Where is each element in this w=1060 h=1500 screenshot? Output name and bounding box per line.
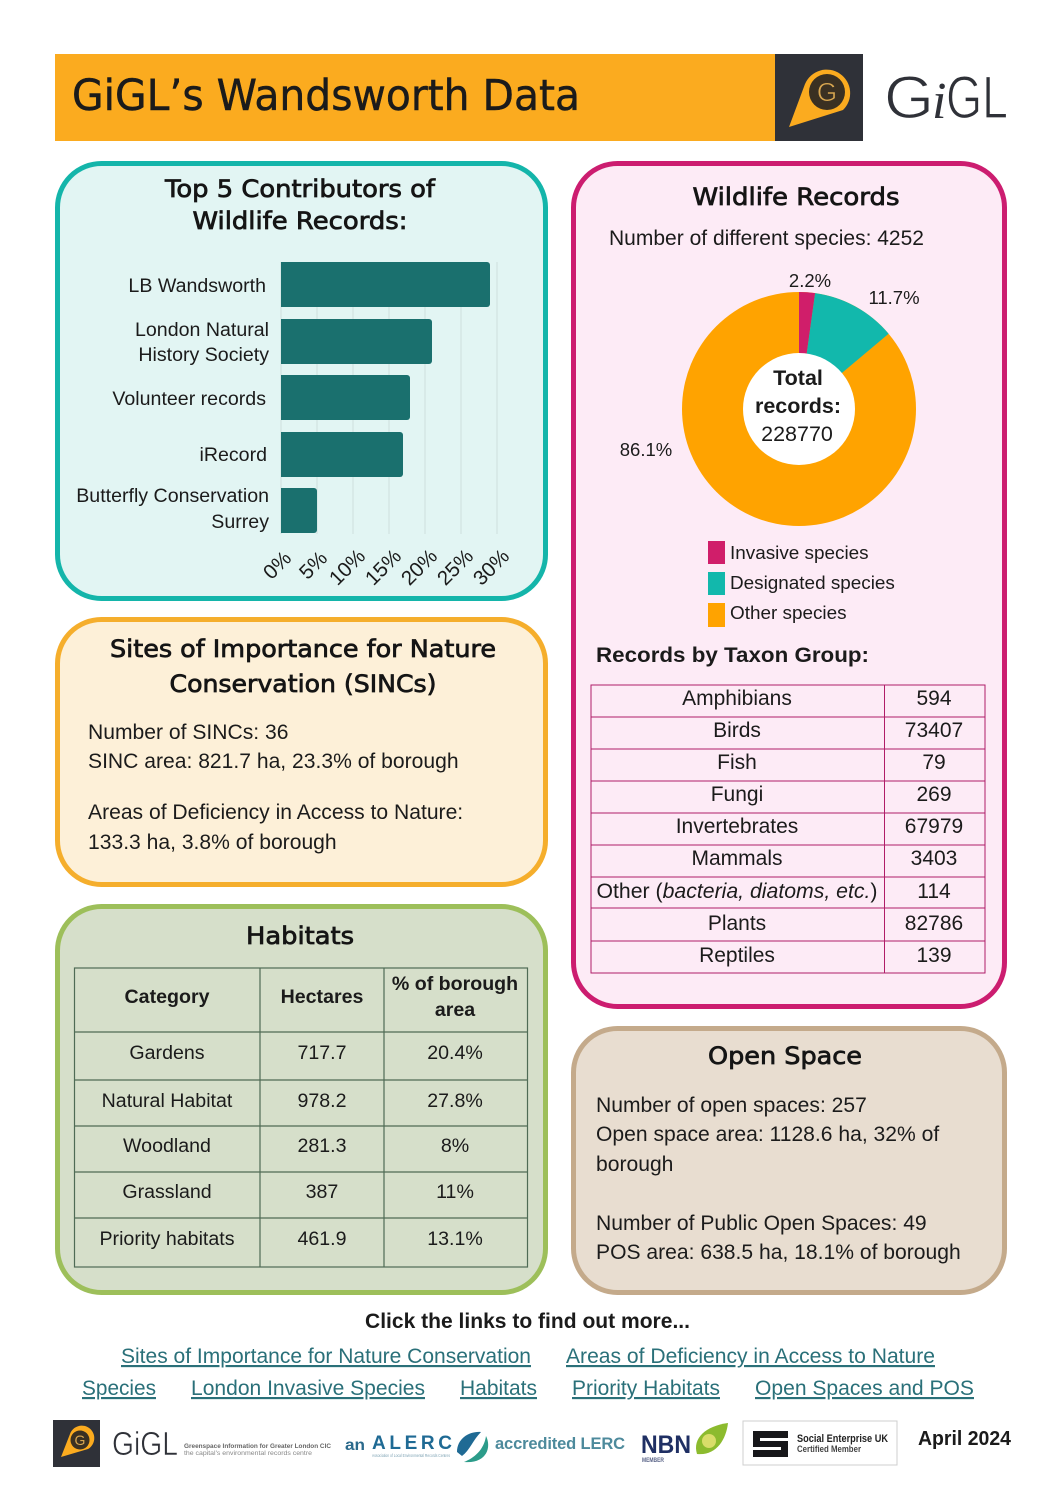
table: taxon groups: 594 bbox=[916, 687, 952, 710]
donut chart: species share of records bbox=[620, 270, 920, 526]
heading: records by taxon group: Records by Taxon Group: bbox=[596, 643, 869, 667]
bar chart: contributors: iRecord bbox=[199, 444, 267, 466]
logo: GiGL wordmark bbox=[884, 64, 1008, 131]
title: GiGL’s Wandsworth Data bbox=[72, 71, 580, 121]
bar chart: contributors: History Society bbox=[138, 344, 269, 366]
bar chart: contributors: 5% bbox=[295, 547, 332, 584]
table: habitats: Hectares bbox=[281, 986, 363, 1008]
table: taxon groups: Fish bbox=[717, 751, 757, 774]
logo: GiGL wordmark: G bbox=[884, 64, 934, 131]
table: habitats: Gardens bbox=[129, 1042, 205, 1064]
footer logo: NBN member bbox=[641, 1423, 728, 1464]
table: taxon groups: 139 bbox=[916, 944, 952, 967]
heading: habitats: Habitats bbox=[246, 922, 354, 950]
text: SINC figures: SINC area: 821.7 ha, 23.3% of borough bbox=[88, 750, 459, 773]
table: taxon groups: 73407 bbox=[905, 719, 963, 742]
heading: top 5 contributors: Top 5 Contributors of bbox=[164, 175, 436, 203]
heading: SINCs: Sites of Importance for Nature bbox=[110, 635, 496, 663]
table: habitats: % of borough bbox=[392, 973, 518, 995]
panel: SINCs bbox=[58, 620, 546, 884]
text: SINC figures: Areas of Deficiency in Access to Nature: bbox=[88, 801, 463, 824]
table: habitats bbox=[74, 968, 528, 1267]
table: taxon groups: Other (bacteria, diatoms, etc.) bbox=[596, 880, 878, 903]
table: taxon groups: Fungi bbox=[711, 783, 763, 806]
text: SINC figures bbox=[88, 721, 463, 854]
table: habitats: 8% bbox=[441, 1135, 469, 1157]
footer logo: GiGL: G bbox=[75, 1432, 85, 1448]
table: taxon groups: 114 bbox=[917, 880, 951, 903]
table: habitats: Natural Habitat bbox=[102, 1090, 233, 1112]
footer logo: ALERC accredited LERC: an bbox=[345, 1437, 365, 1454]
table: habitats: 461.9 bbox=[297, 1228, 347, 1250]
bar chart: contributors: 25% bbox=[433, 545, 478, 590]
bar chart: contributors: LB Wandsworth bbox=[128, 275, 266, 297]
footer logo: ALERC accredited LERC bbox=[345, 1432, 625, 1462]
links heading: Click the links to find out more... bbox=[365, 1310, 690, 1333]
bar chart: contributors: London Natural bbox=[135, 319, 269, 341]
text: species count: Number of different species: 4252 bbox=[609, 227, 924, 250]
text: open space figures: Open space area: 1128.6 ha, 32% of bbox=[596, 1123, 939, 1146]
legend: Invasive species bbox=[730, 543, 869, 564]
donut chart: species share of records: 228770 bbox=[761, 422, 833, 446]
bar chart: contributors: 0% bbox=[259, 547, 296, 584]
links: Species bbox=[82, 1376, 156, 1400]
icon: GiGL pin logo: G bbox=[817, 77, 837, 107]
text: open space figures: Number of open spaces: 257 bbox=[596, 1094, 867, 1117]
footer logo: ALERC accredited LERC: ALERC bbox=[372, 1433, 452, 1454]
table: taxon groups bbox=[591, 685, 985, 973]
legend: Designated species bbox=[730, 573, 895, 594]
footer logo: ALERC accredited LERC: accredited LERC bbox=[495, 1435, 625, 1453]
table: taxon groups: 82786 bbox=[905, 912, 963, 935]
table: taxon groups: 79 bbox=[922, 751, 946, 774]
heading: open space: Open Space bbox=[708, 1042, 862, 1070]
links: Open Spaces and POS bbox=[755, 1376, 974, 1400]
table: habitats: Priority habitats bbox=[99, 1228, 235, 1250]
footer logo: Social Enterprise UK: Certified Member bbox=[797, 1444, 861, 1455]
table: habitats: area bbox=[435, 999, 476, 1021]
legend: Other species bbox=[730, 603, 847, 624]
text: open space figures: borough bbox=[596, 1153, 673, 1176]
donut chart: species share of records: Total bbox=[773, 366, 823, 390]
footer logo: Social Enterprise UK: Social Enterprise UK bbox=[797, 1433, 888, 1445]
table: habitats: 387 bbox=[306, 1181, 338, 1203]
donut chart: species share of records: 11.7% bbox=[868, 287, 920, 308]
bar chart: contributors: 20% bbox=[397, 545, 442, 590]
logo: GiGL wordmark: i bbox=[932, 73, 946, 130]
links bbox=[82, 1344, 974, 1400]
heading: wildlife records: Wildlife Records bbox=[692, 183, 900, 211]
bar chart: contributors: 10% bbox=[325, 545, 370, 590]
table: taxon groups: Reptiles bbox=[699, 944, 775, 967]
links: Areas of Deficiency in Access to Nature bbox=[566, 1344, 935, 1368]
heading: top 5 contributors bbox=[164, 175, 436, 235]
heading: top 5 contributors: Wildlife Records: bbox=[192, 207, 408, 235]
table: habitats: 281.3 bbox=[297, 1135, 347, 1157]
logo: GiGL wordmark: GL bbox=[946, 64, 1008, 131]
donut chart: species share of records: records: bbox=[755, 394, 841, 418]
table: habitats: 978.2 bbox=[297, 1090, 347, 1112]
date: April 2024 bbox=[918, 1428, 1012, 1450]
table: taxon groups: Mammals bbox=[691, 847, 783, 870]
footer logo: GiGL: the capital's environmental records centre bbox=[184, 1451, 313, 1457]
text: open space figures bbox=[596, 1094, 961, 1264]
table: habitats: Woodland bbox=[123, 1135, 211, 1157]
links: Sites of Importance for Nature Conservation bbox=[121, 1344, 531, 1368]
links: London Invasive Species bbox=[191, 1376, 425, 1400]
heading: SINCs bbox=[110, 635, 496, 698]
table: taxon groups: Amphibians bbox=[682, 687, 792, 710]
panel: open space bbox=[574, 1028, 1004, 1292]
footer logo: GiGL: Greenspace Information for Greater London CIC bbox=[184, 1443, 331, 1450]
text: SINC figures: 133.3 ha, 3.8% of borough bbox=[88, 831, 337, 854]
text: SINC figures: Number of SINCs: 36 bbox=[88, 721, 288, 744]
donut chart: species share of records: 86.1% bbox=[620, 439, 672, 460]
footer logo: NBN member: MEMBER bbox=[642, 1458, 665, 1464]
panel: top 5 contributors bbox=[58, 164, 546, 598]
bar chart: contributors: 15% bbox=[361, 545, 406, 590]
footer logo: NBN member: NBN bbox=[641, 1431, 691, 1459]
bar chart: contributors: Volunteer records bbox=[112, 388, 266, 410]
footer logo: ALERC accredited LERC: Association of Local Environmental Records Centres bbox=[372, 1453, 451, 1458]
table: taxon groups: Invertebrates bbox=[676, 815, 798, 838]
table: taxon groups: 67979 bbox=[905, 815, 963, 838]
bar chart: contributors bbox=[76, 262, 514, 590]
text: open space figures: POS area: 638.5 ha, 18.1% of borough bbox=[596, 1241, 961, 1264]
bar chart: contributors: Butterfly Conservation bbox=[76, 485, 269, 507]
heading: SINCs: Conservation (SINCs) bbox=[170, 670, 436, 698]
links: Priority Habitats bbox=[572, 1376, 720, 1400]
table: habitats: Category bbox=[125, 986, 210, 1008]
table: habitats: 20.4% bbox=[427, 1042, 483, 1064]
footer logo: GiGL bbox=[53, 1420, 331, 1467]
icon: GiGL pin logo bbox=[775, 54, 863, 141]
donut chart: species share of records: 2.2% bbox=[789, 270, 831, 291]
text: open space figures: Number of Public Open Spaces: 49 bbox=[596, 1212, 927, 1235]
table: taxon groups: Plants bbox=[708, 912, 766, 935]
table: habitats: 717.7 bbox=[297, 1042, 347, 1064]
panel: wildlife records bbox=[574, 164, 1004, 1006]
table: taxon groups: Birds bbox=[713, 719, 761, 742]
table: habitats: Grassland bbox=[122, 1181, 212, 1203]
links: Habitats bbox=[460, 1376, 537, 1400]
bar chart: contributors: Surrey bbox=[211, 511, 269, 533]
table: habitats: 13.1% bbox=[427, 1228, 483, 1250]
footer logo: Social Enterprise UK bbox=[743, 1421, 897, 1465]
panel: habitats bbox=[58, 906, 546, 1292]
table: habitats: 27.8% bbox=[427, 1090, 483, 1112]
table: taxon groups: 3403 bbox=[911, 847, 957, 870]
table: habitats: 11% bbox=[436, 1181, 474, 1203]
bar chart: contributors: 30% bbox=[469, 545, 514, 590]
table: taxon groups: 269 bbox=[916, 783, 952, 806]
footer logo: GiGL: GiGL bbox=[112, 1425, 178, 1462]
legend bbox=[708, 541, 895, 627]
header banner bbox=[55, 54, 775, 141]
